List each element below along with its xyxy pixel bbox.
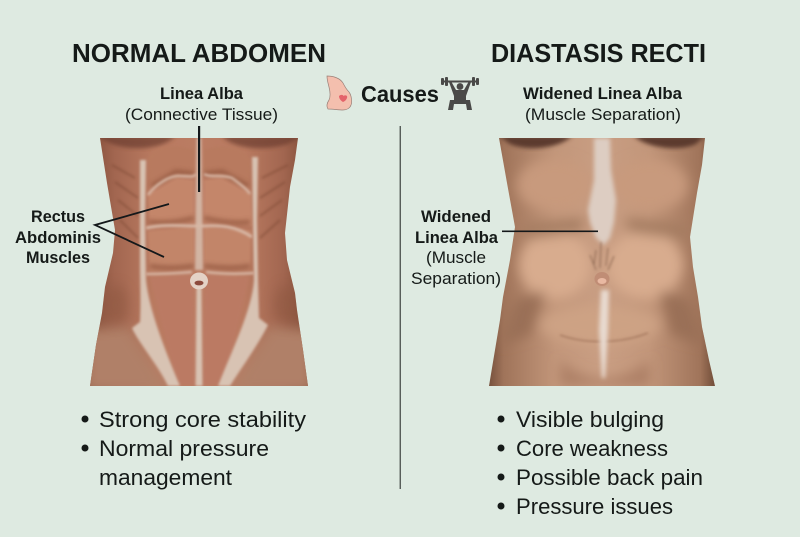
abdominal muscle blocks	[148, 179, 252, 270]
label: rectus abdominis muscles: Rectus	[31, 208, 85, 226]
divider	[400, 126, 401, 489]
rib and belly tones	[500, 159, 705, 345]
icon: pregnant belly	[327, 76, 352, 110]
label: linea alba: (Connective Tissue)	[125, 106, 278, 124]
white tendon bands	[132, 138, 268, 386]
label: widened linea alba heading	[523, 85, 683, 124]
illustration: normal abdomen torso	[85, 135, 313, 392]
icon: weightlifter	[441, 77, 479, 110]
label: widened linea alba callout: Widened	[421, 208, 491, 226]
lower shading	[558, 364, 651, 386]
heading: diastasis recti: DIASTASIS RECTI	[491, 40, 706, 68]
muscle shadows	[149, 172, 250, 268]
oblique shadow at waist	[102, 288, 298, 322]
oblique ribs	[112, 165, 288, 238]
label: rectus abdominis muscles	[15, 208, 101, 267]
label: causes: Causes	[361, 81, 439, 107]
navel	[190, 272, 208, 290]
list: diastasis recti symptoms: Pressure issues	[516, 494, 673, 519]
list: normal abdomen benefits: management	[99, 465, 233, 490]
label: widened linea alba heading: (Muscle Separation)	[525, 106, 681, 124]
hip tone	[85, 326, 313, 392]
navel wrinkles	[590, 242, 614, 270]
list: diastasis recti symptoms: Visible bulging	[516, 407, 664, 432]
heading: normal abdomen: NORMAL ABDOMEN	[72, 40, 326, 68]
label: widened linea alba callout: Separation)	[411, 270, 501, 288]
leader line: widened linea alba	[502, 230, 598, 232]
tendinous lines	[146, 174, 254, 274]
widened linea alba band	[588, 138, 616, 378]
lower belly crease	[560, 333, 648, 342]
list: diastasis recti symptoms	[498, 407, 703, 519]
list: diastasis recti symptoms: Possible back pain	[516, 465, 703, 490]
label: linea alba: Linea Alba	[160, 85, 244, 103]
label: rectus abdominis muscles: Muscles	[26, 249, 90, 267]
chest shadow	[499, 136, 705, 148]
list: normal abdomen benefits: Normal pressure	[99, 436, 269, 461]
illustration: diastasis recti torso	[485, 135, 719, 390]
leader line: linea alba	[198, 126, 200, 192]
label: widened linea alba callout	[411, 208, 501, 288]
label: linea alba	[125, 85, 278, 124]
label: widened linea alba heading: Widened Linea Alba	[523, 85, 683, 103]
list: normal abdomen benefits	[82, 407, 307, 490]
leader lines: rectus abdominis	[95, 204, 169, 257]
label: widened linea alba callout: Linea Alba	[415, 229, 499, 247]
list: normal abdomen benefits: Strong core stability	[99, 407, 307, 432]
label: widened linea alba callout: (Muscle	[426, 249, 486, 267]
navel	[594, 272, 610, 286]
chest shadow	[96, 136, 302, 148]
list: diastasis recti symptoms: Core weakness	[516, 436, 668, 461]
label: rectus abdominis muscles: Abdominis	[15, 229, 101, 247]
